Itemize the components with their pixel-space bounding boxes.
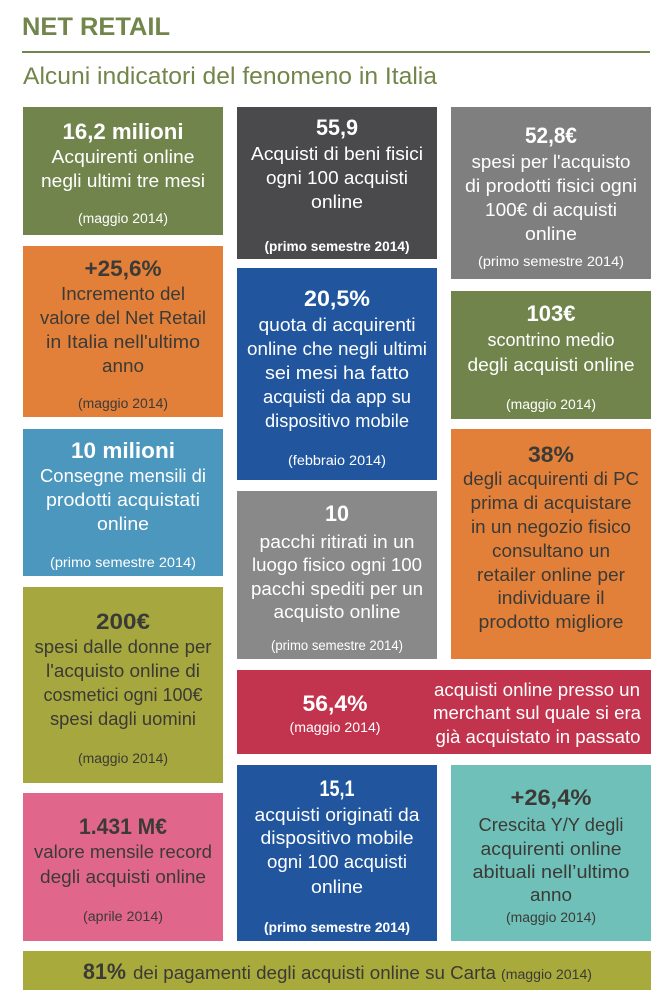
panel: 38%: degli acquirenti di PC xyxy=(463,469,639,489)
panel: 55,9 xyxy=(237,107,437,259)
panel: 56,4% xyxy=(237,670,651,754)
panel: 20,5%: dispositivo mobile xyxy=(265,411,409,431)
panel: +26,4%: +26,4% xyxy=(510,785,592,810)
panel: 103€: (maggio 2014) xyxy=(506,397,596,412)
panel: 56,4%: già acquistato in passato xyxy=(436,727,640,747)
panel: 10 pacchi: pacchi ritirati in un xyxy=(260,532,414,552)
title: NET RETAIL xyxy=(22,13,170,41)
panel: 52,8€: 52,8€ xyxy=(525,123,577,148)
panel: 20,5%: sei mesi ha fatto xyxy=(265,363,409,383)
panel: 16,2 milioni: (maggio 2014) xyxy=(78,211,168,226)
panel: 103€: scontrino medio xyxy=(488,330,614,350)
panel: +25,6%: (maggio 2014) xyxy=(78,396,168,411)
panel: 52,8€: spesi per l'acquisto xyxy=(472,152,630,172)
panel: 10 pacchi: pacchi spediti per un xyxy=(251,579,423,599)
panel: 20,5% xyxy=(237,268,437,480)
panel: 1.431 M€: degli acquisti online xyxy=(40,867,206,887)
panel: 56,4%: 56,4% xyxy=(302,691,368,716)
panel: 20,5%: quota di acquirenti xyxy=(258,315,416,335)
subtitle: Alcuni indicatori del fenomeno in Italia xyxy=(23,63,438,90)
panel: +25,6%: +25,6% xyxy=(84,256,162,281)
panel: +25,6%: valore del Net Retail xyxy=(40,308,206,328)
panel: 38%: consultano un xyxy=(492,541,610,561)
panel: 38% xyxy=(451,429,651,659)
panel: 103€ xyxy=(451,291,651,419)
panel: 10 pacchi: luogo fisico ogni 100 xyxy=(252,555,422,575)
panel: 52,8€: (primo semestre 2014) xyxy=(478,254,624,269)
panel: 15,1: (primo semestre 2014) xyxy=(264,920,410,935)
panel: 10 pacchi: (primo semestre 2014) xyxy=(271,638,403,653)
panel: 10 pacchi xyxy=(237,491,437,659)
panel: 81% footer band: (maggio 2014) xyxy=(501,967,592,982)
panel: 15,1: dispositivo mobile xyxy=(260,828,414,848)
panel: +25,6%: Incremento del xyxy=(61,284,185,304)
panel: 81% footer band xyxy=(23,951,651,990)
panel: 16,2 milioni: 16,2 milioni xyxy=(62,119,184,144)
panel: +26,4%: abituali nell’ultimo xyxy=(472,862,630,882)
panel: 10 pacchi: acquisto online xyxy=(274,602,400,622)
panel: 20,5%: acquisti da app su xyxy=(263,387,411,407)
panel: +25,6%: in Italia nell'ultimo xyxy=(46,332,200,352)
panel: 16,2 milioni xyxy=(23,107,223,235)
panel: +26,4%: anno xyxy=(530,885,572,905)
panel: 103€: degli acquisti online xyxy=(468,355,634,375)
panel: +26,4%: Crescita Y/Y degli xyxy=(478,815,624,835)
panel: 200€: 200€ xyxy=(96,609,150,634)
panel: +26,4% xyxy=(451,765,651,941)
panel: 10 milioni: prodotti acquistati xyxy=(46,490,200,510)
panel: 20,5%: 20,5% xyxy=(304,286,370,311)
panel: 56,4%: acquisti online presso un xyxy=(434,680,640,700)
panel: 56,4%: merchant sul quale si era xyxy=(433,703,642,723)
panel: 55,9: (primo semestre 2014) xyxy=(264,239,410,254)
panel: 200€: (maggio 2014) xyxy=(78,751,168,766)
panel: 200€ xyxy=(23,587,223,783)
panel: 55,9: 55,9 xyxy=(316,115,358,140)
panel: 52,8€: di prodotti fisici ogni xyxy=(465,176,637,196)
panel: 38%: individuare il xyxy=(498,588,604,608)
panel: 38%: 38% xyxy=(528,442,574,467)
panel: 1.431 M€: valore mensile record xyxy=(34,842,212,862)
panel: 52,8€ xyxy=(451,107,651,279)
panel: 38%: retailer online per xyxy=(477,565,625,585)
panel: 55,9: ogni 100 acquisti xyxy=(266,168,408,188)
panel: 52,8€: online xyxy=(525,224,577,244)
panel: 55,9: online xyxy=(311,192,363,212)
panel: 200€: spesi dagli uomini xyxy=(50,709,196,729)
panel: 1.431 M€: (aprile 2014) xyxy=(83,909,163,924)
panel: 20,5%: (febbraio 2014) xyxy=(288,453,386,468)
panel: 10 milioni xyxy=(23,429,223,576)
panel: 16,2 milioni: Acquirenti online xyxy=(52,147,194,167)
panel: 52,8€: 100€ di acquisti xyxy=(485,200,617,220)
panel: 20,5%: online che negli ultimi xyxy=(247,339,427,359)
panel: 15,1 xyxy=(237,765,437,941)
panel: +26,4%: (maggio 2014) xyxy=(506,910,596,925)
panel: 10 milioni: Consegne mensili di xyxy=(40,466,206,486)
panel: 200€: cosmetici ogni 100€ xyxy=(44,685,202,705)
panel: 56,4%: (maggio 2014) xyxy=(290,720,380,735)
panel: 81% footer band: 81% xyxy=(83,959,126,984)
panel: 10 milioni: (primo semestre 2014) xyxy=(50,555,196,570)
panel: 15,1: acquisti originati da xyxy=(254,805,421,825)
panel: 15,1: online xyxy=(311,877,363,897)
panel: 10 milioni: 10 milioni xyxy=(71,438,175,463)
panel: 38%: prodotto migliore xyxy=(478,612,624,632)
panel: 81% footer band: dei pagamenti degli acquisti online su Carta xyxy=(133,963,497,983)
panel: 10 milioni: online xyxy=(97,514,149,534)
panel: 1.431 M€: 1.431 M€ xyxy=(79,814,167,839)
panel: +26,4%: acquirenti online xyxy=(480,839,622,859)
panel: 38%: prima di acquistare xyxy=(470,493,632,513)
panel: 200€: l'acquisto online di xyxy=(46,661,200,681)
panel: +25,6%: anno xyxy=(102,356,144,376)
panel: 15,1: ogni 100 acquisti xyxy=(267,852,407,872)
panel: 1.431 M€ xyxy=(23,793,223,941)
panel: 55,9: Acquisti di beni fisici xyxy=(251,144,423,164)
panel: 200€: spesi dalle donne per xyxy=(34,637,212,657)
panel: 10 pacchi: 10 xyxy=(325,501,349,526)
panel: 16,2 milioni: negli ultimi tre mesi xyxy=(41,171,205,191)
panel: 103€: 103€ xyxy=(526,301,576,326)
panel: 38%: in un negozio fisico xyxy=(471,517,631,537)
panel: 15,1: 15,1 xyxy=(320,776,354,801)
panel: +25,6% xyxy=(23,246,223,417)
